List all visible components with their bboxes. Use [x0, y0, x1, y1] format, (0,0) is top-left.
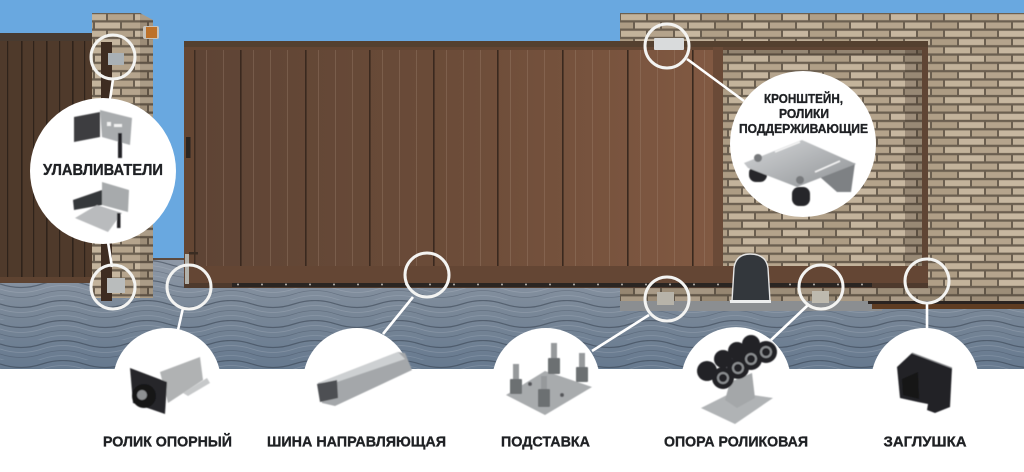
icon: end cap	[897, 353, 952, 413]
icon: guide rail	[317, 352, 412, 406]
icon: base stand	[506, 343, 592, 415]
left fence section	[0, 33, 92, 283]
panel: support roller	[103, 328, 232, 450]
small highlight rings	[91, 24, 949, 321]
icon: support roller	[130, 357, 210, 414]
panel: bracket and support rollers	[730, 71, 876, 217]
heading: bracket and support rollers: РОЛИКИ	[779, 106, 829, 121]
brick wall with gate opening	[620, 13, 1024, 311]
icon: bracket with rollers	[744, 140, 856, 206]
connector lines	[108, 59, 927, 351]
gate hardware details	[654, 38, 829, 305]
panel: roller carriage	[664, 327, 808, 450]
sliding gate	[184, 41, 928, 288]
sliding gate motor	[730, 254, 771, 303]
icon: upper catcher	[74, 110, 132, 158]
icon: roller carriage	[697, 335, 777, 424]
label: support roller: РОЛИК ОПОРНЫЙ	[103, 432, 232, 450]
heading: bracket and support rollers	[739, 91, 868, 136]
heading: catchers: УЛАВЛИВАТЕЛИ	[43, 162, 163, 179]
white lower band	[0, 369, 1024, 472]
brick pillar	[92, 13, 153, 301]
heading: bracket and support rollers: КРОНШТЕЙН,	[764, 91, 843, 106]
sky background	[0, 0, 1024, 262]
label: roller carriage: ОПОРА РОЛИКОВАЯ	[664, 434, 808, 450]
panel: base stand	[494, 328, 598, 450]
panel: catchers	[30, 98, 176, 244]
signal lamp	[143, 26, 159, 39]
label: base stand: ПОДСТАВКА	[501, 434, 590, 450]
paved ground	[0, 258, 1024, 370]
heading: bracket and support rollers: ПОДДЕРЖИВАЮЩИЕ	[739, 121, 868, 136]
panel: end cap	[873, 328, 977, 450]
label: guide rail: ШИНА НАПРАВЛЯЮЩАЯ	[267, 434, 446, 450]
panel: guide rail	[267, 328, 446, 450]
icon: lower catcher	[73, 182, 129, 232]
label: end cap: ЗАГЛУШКА	[884, 434, 967, 450]
